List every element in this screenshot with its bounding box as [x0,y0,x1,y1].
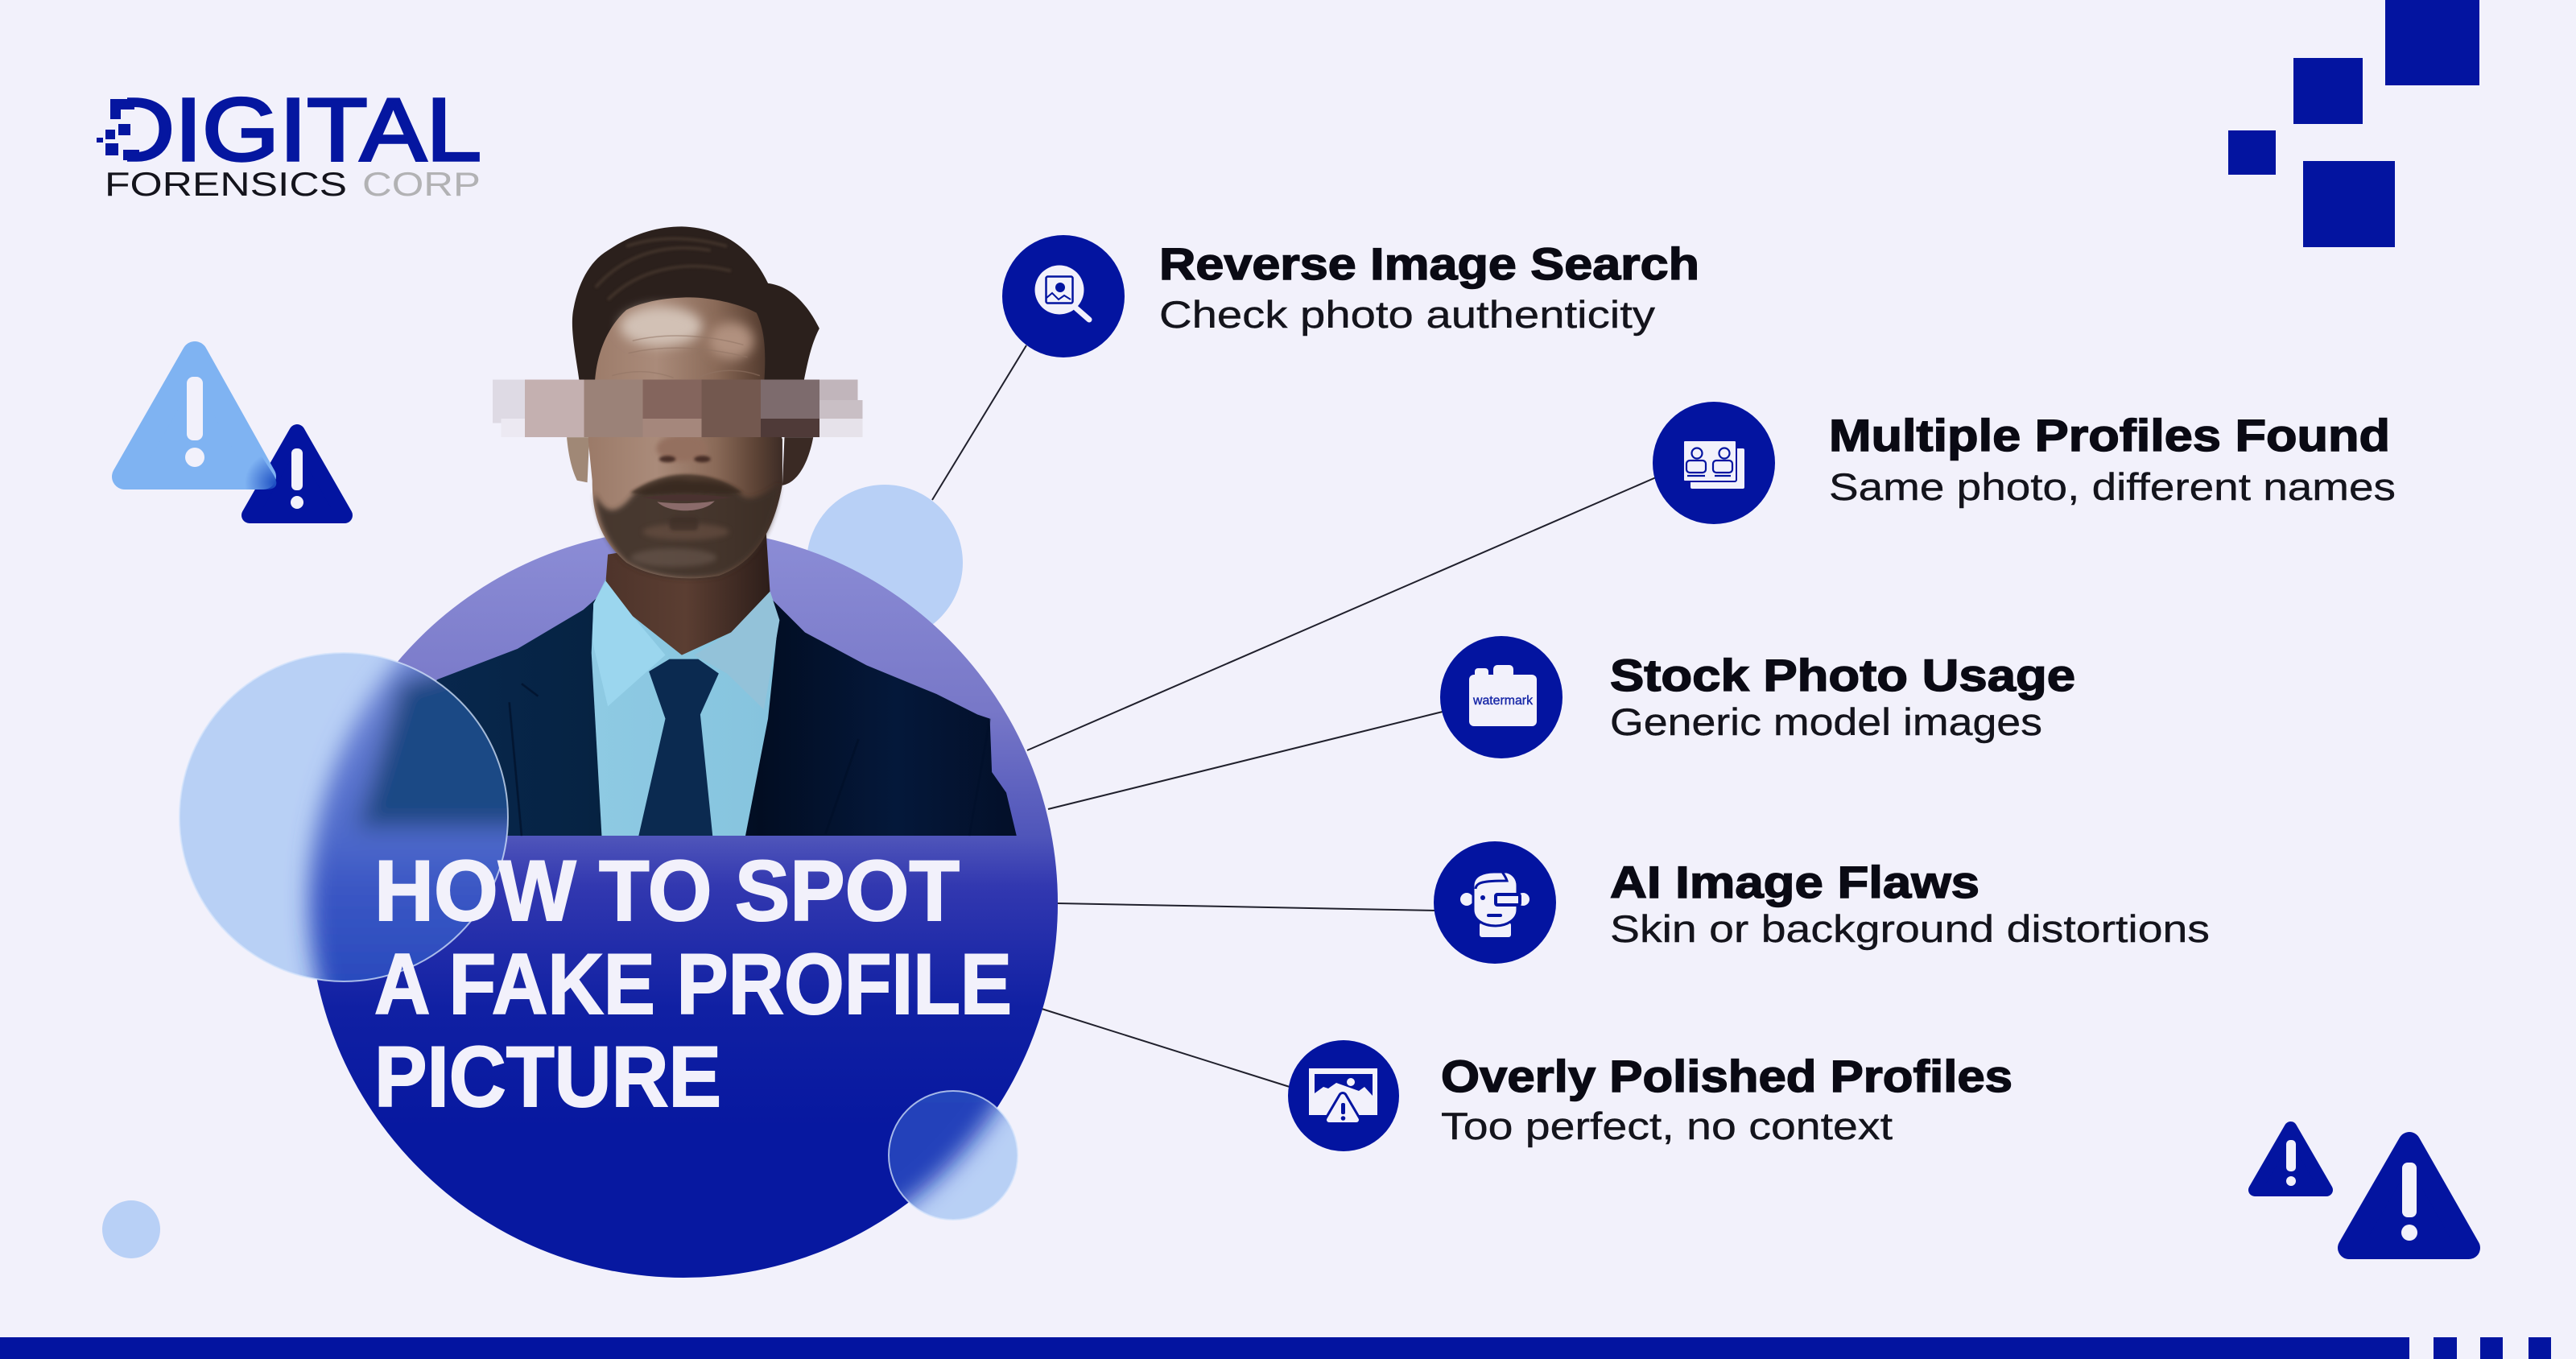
decorative squares top right [2228,0,2479,247]
logo: Digital Forensics Corp: FORENSICS [105,165,347,203]
lips [642,494,731,501]
main circle [309,529,1058,1278]
tie [638,659,719,836]
description: Too perfect, no context [1441,1105,1893,1147]
heading: Multiple Profiles Found [1829,410,2390,461]
warning icons top left [125,354,345,515]
icon: AI face [1434,841,1556,964]
bottom bar with blocks [0,1337,2551,1359]
hair strands [596,238,731,299]
description: Skin or background distortions [1610,907,2210,950]
chin stubble highlight [630,548,716,567]
ears [567,437,589,482]
item: overly polished profiles [1288,1040,2013,1151]
warning icons bottom right [2255,1128,2469,1248]
item: reverse image search [1002,235,1699,357]
suit [362,596,1017,836]
item: multiple profiles found [1653,402,2396,524]
frosted glass circle left [179,652,509,982]
title: HOW TO SPOT [374,842,960,939]
title: PICTURE [374,1028,721,1125]
pixelated censor bar over eyes [493,380,862,437]
heading: Reverse Image Search [1159,238,1699,289]
neck [606,530,770,655]
icon: camera with watermark [1440,636,1563,758]
nose [656,436,708,461]
jacket folds [510,684,990,836]
heading: AI Image Flaws [1610,857,1979,907]
connector lines [932,345,1656,1087]
moustache [630,474,742,494]
frosted glass circle bottom right [888,1090,1018,1221]
icon: landscape picture with warning [1288,1040,1399,1151]
soul patch [670,518,698,531]
heading: Overly Polished Profiles [1441,1051,2013,1101]
title: A FAKE PROFILE [374,936,1012,1032]
logo: Digital Forensics Corp: CORP [362,165,481,203]
heading: Stock Photo Usage [1610,650,2075,700]
forehead wrinkles [612,336,760,378]
collar [592,581,666,706]
bottom-left dot [102,1200,160,1258]
face [588,297,782,578]
hair [572,226,819,386]
portrait illustration with pixelated eyes [362,226,1017,836]
shirt [592,579,778,836]
logo: Digital Forensics Corp: DIGITAL [103,81,481,180]
item: stock photo usage [1440,636,2075,758]
description: Check photo authenticity [1159,293,1656,336]
icon: magnifier on image [1002,235,1125,357]
beard [595,479,779,578]
item: AI image flaws [1434,841,2210,964]
forehead highlights [620,307,702,346]
small circle behind the portrait [807,485,963,641]
title [374,842,1012,1125]
description: Generic model images [1610,700,2042,743]
icon: camera with watermark: watermark [1472,694,1534,708]
icon: profile cards [1653,402,1775,524]
description: Same photo, different names [1829,465,2396,508]
